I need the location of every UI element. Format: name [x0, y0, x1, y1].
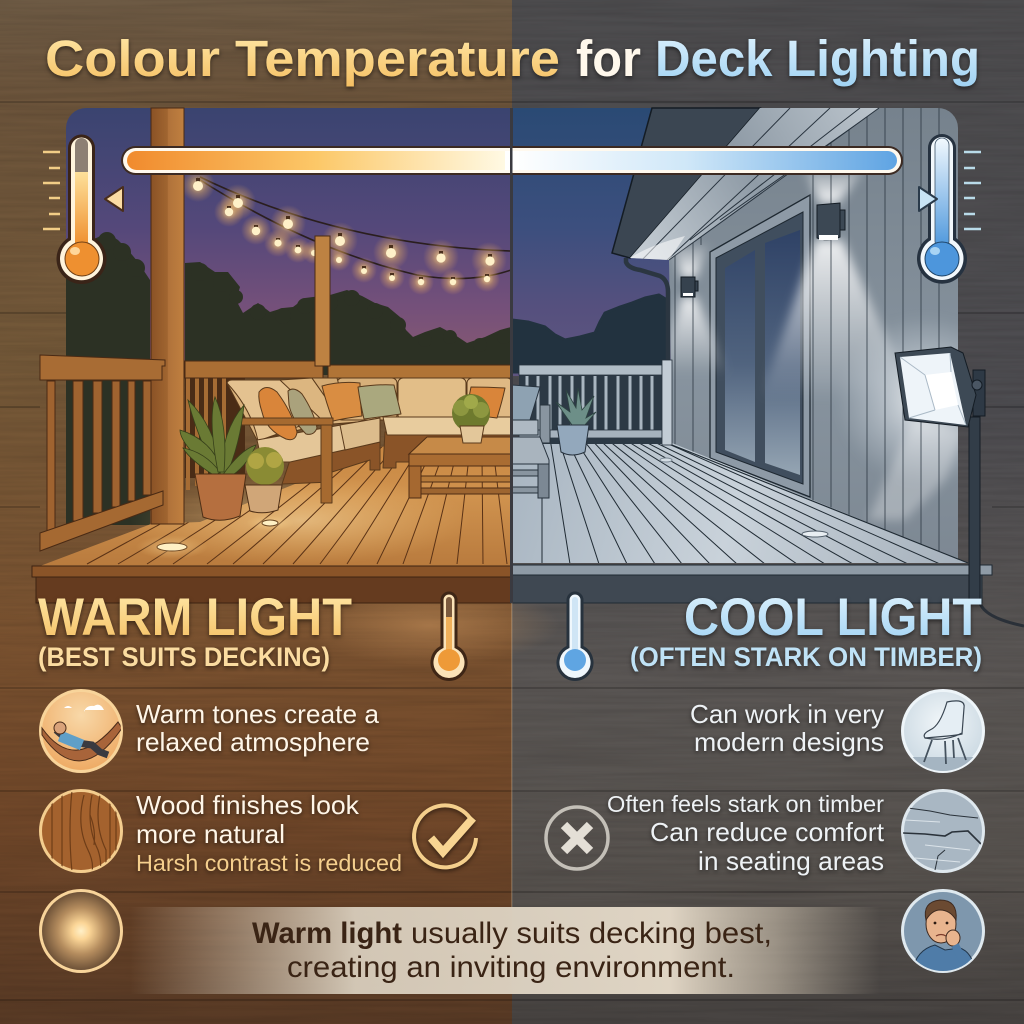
text: stark on timber [607, 791, 885, 876]
text: wood finishes [136, 790, 402, 876]
small thermometer cool [558, 593, 592, 679]
main post warm [151, 108, 184, 524]
text: wood finishes: Harsh contrast is reduced [136, 850, 402, 876]
heading: cool light: COOL LIGHT [684, 588, 982, 647]
cool siding wall [669, 108, 958, 560]
deck-edge fascia cool [512, 565, 992, 603]
text: stark on timber: Often feels stark on timber [607, 791, 884, 817]
text: stark on timber: in seating areas [698, 846, 884, 876]
deck-edge fascia warm [32, 566, 512, 603]
wall light beams and siding lines [670, 108, 958, 551]
warm dusk sky [66, 108, 511, 375]
text: warm tones: relaxed atmosphere [136, 727, 370, 757]
text: wood finishes: more natural [136, 819, 285, 849]
wall lamp upper [817, 203, 845, 240]
left railing warm [40, 355, 165, 551]
text: modern designs: modern designs [694, 727, 884, 757]
cool tree line [512, 295, 667, 372]
summary banner: creating an inviting environment. [287, 951, 735, 984]
small table plant warm [452, 394, 490, 443]
icon: cracked timber [901, 789, 985, 873]
sliding door [710, 195, 810, 497]
heading: cool light: (OFTEN STARK ON TIMBER) [630, 642, 982, 672]
title: Deck Lighting [655, 30, 980, 87]
flood light and pole [895, 347, 1024, 626]
wall lamp lower [681, 277, 698, 297]
in-deck lights warm [136, 515, 294, 559]
back railing warm [185, 236, 512, 490]
gutter and downpipe [626, 258, 668, 370]
icon: warm glow [39, 889, 123, 973]
heading: warm light: WARM LIGHT [38, 588, 352, 647]
text: warm tones [136, 699, 380, 757]
potted plant cool [556, 388, 596, 455]
text: modern designs [690, 699, 884, 757]
panel: warm deck scene [32, 108, 512, 603]
icon: hammock [39, 689, 123, 773]
title: Colour Temperature [45, 30, 560, 87]
potted plants warm [180, 397, 284, 520]
temperature gradient bar [121, 146, 903, 175]
text: stark on timber: Can reduce comfort [650, 817, 885, 847]
arrow warm [105, 187, 123, 211]
cool decking floor [513, 443, 968, 564]
text: wood finishes: Wood finishes look [136, 790, 360, 820]
icon: modern chair [900, 689, 986, 777]
sectional sofa [227, 378, 512, 503]
icon: wood grain [39, 789, 123, 873]
text: modern designs: Can work in very [690, 699, 884, 729]
warm tree line [66, 232, 511, 525]
sofa end and table cool [512, 385, 550, 498]
warm string lights [181, 168, 511, 295]
title: for [576, 30, 641, 87]
summary banner: usually suits decking best, [411, 917, 772, 950]
title [45, 30, 980, 87]
centre divider [510, 108, 513, 907]
house roof [612, 108, 760, 258]
icon: uneasy person [901, 889, 985, 973]
small thermometer warm [432, 593, 466, 679]
icon: cross mark [546, 807, 608, 869]
warm decking floor [42, 446, 510, 566]
text: warm tones: Warm tones create a [136, 699, 380, 729]
cool dusk sky [512, 108, 672, 376]
heading: warm light: (BEST SUITS DECKING) [38, 642, 330, 672]
soffit [630, 108, 880, 262]
summary banner: Warm light [252, 917, 402, 950]
arrow cool [919, 187, 937, 211]
icon: check mark [414, 805, 476, 867]
summary banner [130, 907, 880, 994]
coffee table warm [409, 437, 512, 498]
heading: cool light [630, 588, 982, 672]
railing cool [519, 360, 672, 445]
panel: cool house scene [512, 108, 1024, 626]
thermometer warm [43, 134, 107, 284]
thermometer cool [917, 134, 981, 284]
heading: warm light [38, 588, 352, 672]
